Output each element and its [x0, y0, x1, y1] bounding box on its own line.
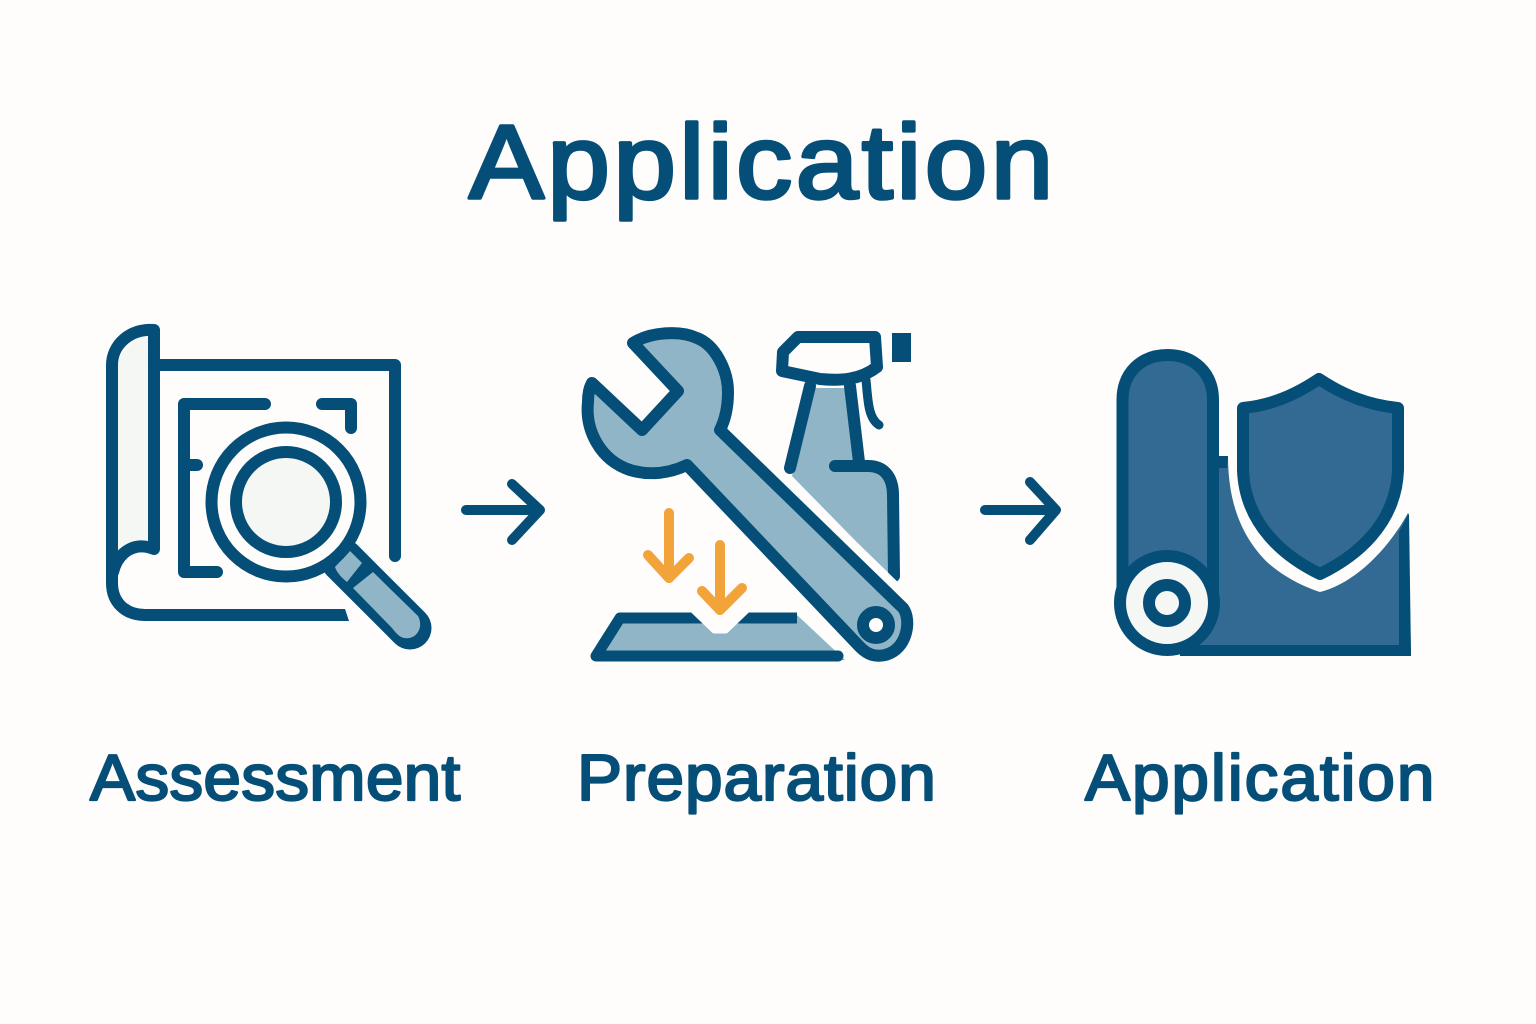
- title: Application: [469, 104, 1053, 221]
- label: assessment: Assessment: [90, 742, 460, 815]
- icon: blueprint with magnifying glass: [112, 330, 420, 638]
- label: application: Application: [1085, 742, 1434, 815]
- label: preparation: Preparation: [577, 742, 936, 815]
- arrow: assessment to preparation: [466, 484, 540, 540]
- arrow: preparation to application: [985, 482, 1056, 540]
- icon: protective membrane roll with shield: [1120, 355, 1411, 656]
- icon: wrench, spray bottle and surface: [588, 333, 911, 660]
